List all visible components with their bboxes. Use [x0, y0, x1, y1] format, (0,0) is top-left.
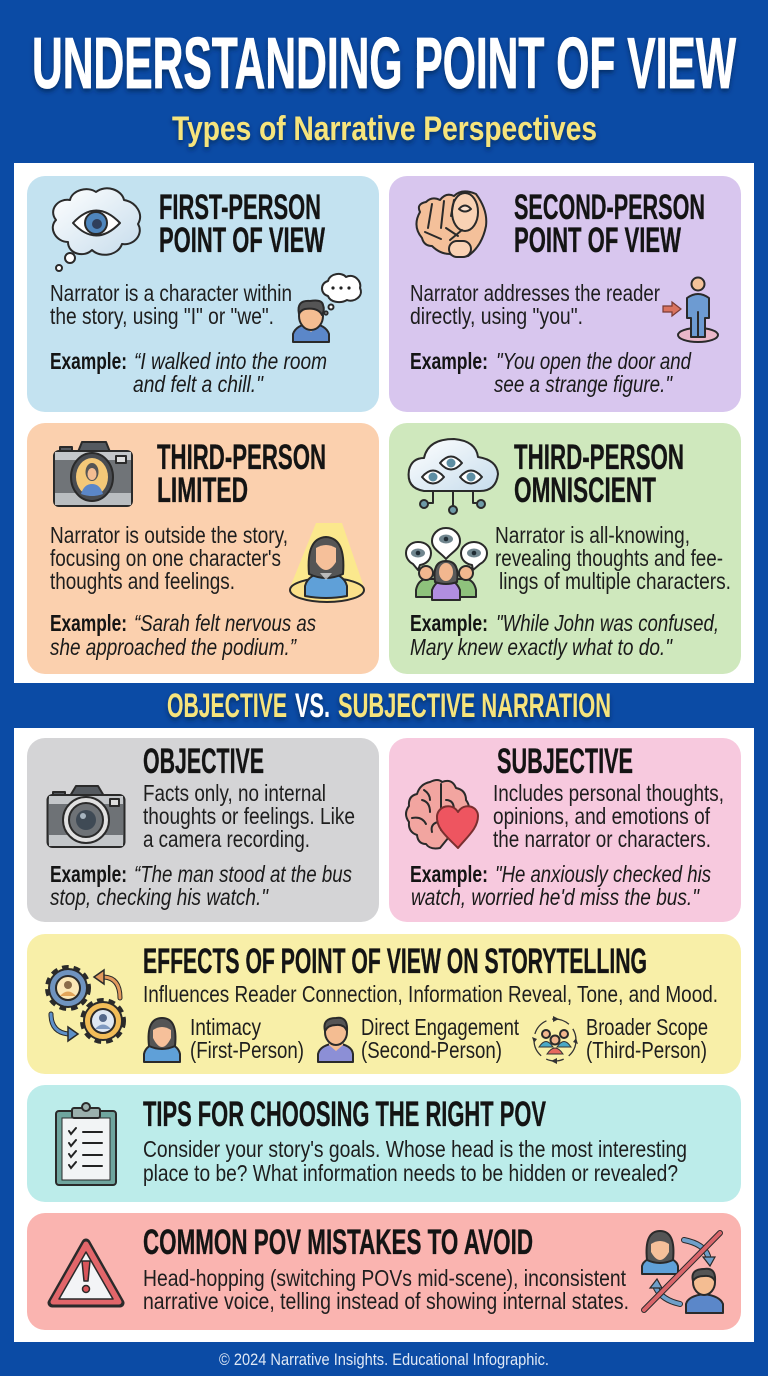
- description: [143, 1136, 687, 1186]
- icon: gears and arrows: [49, 969, 122, 1041]
- description: Head-hopping (switching POVs mid-scene), inconsistent: [143, 1265, 627, 1291]
- example: [50, 610, 316, 660]
- description: directly, using "you".: [410, 303, 583, 329]
- description: the narrator or characters.: [493, 826, 711, 852]
- icon: camera: [48, 786, 124, 847]
- card: third-person limited: [27, 423, 379, 674]
- item: broader scope: Broader Scope: [586, 1014, 708, 1040]
- description: [50, 280, 292, 329]
- panel: narrative perspectives: [14, 163, 754, 683]
- description: opinions, and emotions of: [493, 803, 710, 829]
- example: stop, checking his watch.": [50, 884, 270, 910]
- footer: © 2024 Narrative Insights. Educational Infographic.: [219, 1350, 549, 1369]
- section heading: objective vs subjective: SUBJECTIVE NARRATION: [338, 687, 611, 725]
- icon: woman: [144, 1018, 180, 1062]
- description: [143, 780, 355, 852]
- description: focusing on one character's: [50, 545, 281, 571]
- heading: tips: TIPS FOR CHOOSING THE RIGHT POV: [143, 1095, 546, 1134]
- card: third-person omniscient: [389, 423, 741, 674]
- icon: brain and heart: [406, 780, 478, 848]
- card: mistakes: [27, 1213, 741, 1330]
- icon: head-hopping crossed out: [642, 1231, 723, 1313]
- icon: pointing hand: [416, 191, 486, 257]
- icon: group with thought bubbles: [406, 528, 487, 600]
- icon: man thinking: [293, 274, 361, 342]
- example: [50, 348, 327, 397]
- card: tips: [27, 1085, 741, 1202]
- example: Mary knew exactly what to do.": [410, 634, 674, 660]
- description: Narrator is a character within: [50, 280, 292, 306]
- example: she approached the podium.”: [50, 634, 297, 660]
- description: revealing thoughts and fee-: [495, 545, 723, 571]
- section heading: objective vs subjective: VS.: [295, 687, 330, 725]
- heading: mistakes: COMMON POV MISTAKES TO AVOID: [143, 1223, 533, 1262]
- description: thoughts and feelings.: [50, 568, 235, 594]
- section heading: objective vs subjective: OBJECTIVE: [167, 687, 287, 725]
- description: [410, 280, 660, 329]
- item: intimacy: (First-Person): [190, 1037, 304, 1063]
- heading: third-person omniscient: [514, 438, 684, 510]
- example: “The man stood at the bus: [134, 861, 352, 887]
- item: broader scope: [532, 1014, 708, 1064]
- panel: narration and storytelling: [14, 728, 754, 1342]
- description: [495, 522, 731, 594]
- heading: objective: OBJECTIVE: [143, 742, 264, 781]
- icon: camera with character: [54, 442, 132, 506]
- item: direct engagement: [318, 1014, 519, 1063]
- description: place to be? What information needs to be hidden or revealed?: [143, 1160, 678, 1186]
- icon: woman in spotlight: [289, 523, 365, 602]
- heading: first-person: FIRST-PERSON: [159, 188, 321, 227]
- description: thoughts or feelings. Like: [143, 803, 355, 829]
- example: “I walked into the room: [134, 348, 327, 374]
- card: effects: [27, 934, 741, 1074]
- description: [50, 522, 288, 594]
- item: broader scope: (Third-Person): [586, 1037, 707, 1063]
- icon: group in circular arrows: [532, 1016, 578, 1064]
- heading: third-person limited: [157, 438, 326, 510]
- subtitle: Types of Narrative Perspectives: [172, 110, 597, 148]
- example: [50, 861, 352, 910]
- icon: man: [318, 1018, 353, 1062]
- example: Example:: [410, 610, 488, 636]
- card: objective: [27, 738, 379, 922]
- icon: clipboard checklist: [56, 1103, 116, 1185]
- example: “Sarah felt nervous as: [134, 610, 316, 636]
- heading: third-person limited: LIMITED: [157, 471, 248, 510]
- example: Example:: [50, 348, 127, 374]
- description: Includes personal thoughts,: [493, 780, 724, 806]
- example: "He anxiously checked his: [495, 861, 711, 887]
- heading: third-person limited: THIRD-PERSON: [157, 438, 326, 477]
- example: Example:: [410, 861, 488, 887]
- example: [410, 610, 719, 660]
- description: the story, using "I" or "we".: [50, 303, 274, 329]
- icon: warning triangle: [52, 1243, 120, 1303]
- item: direct engagement: (Second-Person): [361, 1037, 502, 1063]
- description: [493, 780, 724, 852]
- heading: first-person: [159, 188, 325, 260]
- description: Narrator is outside the story,: [50, 522, 288, 548]
- description: narrative voice, telling instead of showing internal states.: [143, 1288, 629, 1314]
- example: [410, 861, 711, 910]
- card: first-person: [27, 176, 379, 412]
- heading: first-person: POINT OF VIEW: [159, 221, 325, 260]
- example: Example:: [50, 861, 127, 887]
- example: Example:: [50, 610, 127, 636]
- example: see a strange figure.": [494, 371, 673, 397]
- example: "You open the door and: [496, 348, 692, 374]
- section heading: objective vs subjective: [167, 687, 611, 725]
- description: Narrator addresses the reader: [410, 280, 660, 306]
- description: Facts only, no internal: [143, 780, 326, 806]
- example: "While John was confused,: [496, 610, 719, 636]
- heading: subjective: SUBJECTIVE: [497, 742, 633, 781]
- heading: third-person omniscient: OMNISCIENT: [514, 471, 656, 510]
- item: direct engagement: Direct Engagement: [361, 1014, 519, 1040]
- icon: person with arrow: [663, 278, 718, 342]
- icon: thought cloud with eye: [53, 188, 140, 271]
- example: and felt a chill.": [133, 371, 265, 397]
- description: a camera recording.: [143, 826, 310, 852]
- card: second-person: [389, 176, 741, 412]
- description: Narrator is all-knowing,: [495, 522, 690, 548]
- example: Example:: [410, 348, 488, 374]
- example: [410, 348, 692, 397]
- item: intimacy: Intimacy: [190, 1014, 261, 1040]
- description: [143, 1265, 629, 1314]
- item: intimacy: [144, 1014, 304, 1063]
- icon: cloud with eyes: [409, 439, 498, 514]
- example: watch, worried he'd miss the bus.": [411, 884, 701, 910]
- card: subjective: [389, 738, 741, 922]
- heading: second-person: [514, 188, 705, 260]
